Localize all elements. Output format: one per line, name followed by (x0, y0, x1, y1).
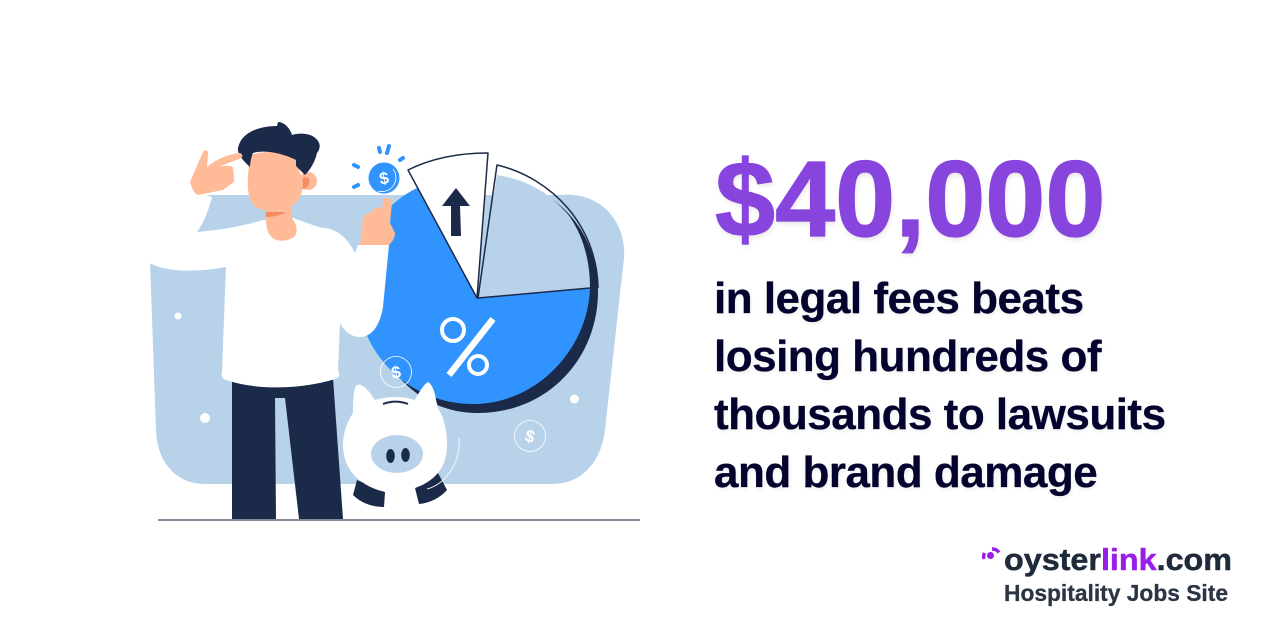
supporting text: thousands to lawsuits (714, 390, 1166, 439)
icon: floating coin on blob: $ (523, 426, 537, 447)
supporting text: and brand damage (714, 448, 1097, 497)
right hand with raised finger (360, 198, 395, 245)
pig snout (371, 435, 423, 473)
icon: floating coin on pie (380, 356, 412, 388)
icon: up arrow (442, 188, 470, 236)
pie light slice outline (478, 165, 598, 298)
supporting text: losing hundreds of (714, 332, 1101, 381)
logo wordmark: oysterlink.com (1004, 542, 1232, 577)
icon: spinning dollar coin: $ (378, 168, 391, 189)
ear (299, 172, 317, 190)
trousers (232, 378, 343, 519)
ground line (158, 519, 640, 521)
pie light slice (478, 175, 590, 298)
pig feet (353, 480, 385, 507)
pie white slice (408, 153, 488, 298)
face (248, 152, 303, 212)
left hand pointing at head (190, 150, 242, 195)
blob decorative dots (174, 312, 579, 423)
icon: percent sign (442, 319, 493, 375)
pig nostrils (386, 449, 395, 463)
background blob (150, 195, 624, 484)
supporting text: in legal fees beats (714, 274, 1084, 323)
man (148, 122, 395, 519)
icon: floating coin on pie: $ (390, 362, 403, 383)
coin sparkle dashes (354, 146, 403, 187)
icon: spinning dollar coin (354, 146, 403, 194)
sweater (148, 190, 389, 387)
neck (266, 208, 297, 241)
neck shadow (266, 212, 286, 217)
icon: oysterlink logo mark (984, 549, 999, 559)
pie main blue (357, 188, 590, 404)
logo tagline: Hospitality Jobs Site (1004, 580, 1228, 606)
hair (238, 122, 320, 175)
pig motion arc (427, 438, 459, 489)
pie shadow crescent (398, 193, 598, 413)
headline figure: $40,000 (715, 138, 1105, 259)
pie chart (357, 153, 598, 413)
piggy bank (343, 382, 459, 507)
pig coin slot (383, 402, 408, 404)
supporting text (714, 274, 1166, 498)
icon: floating coin on blob (514, 420, 546, 452)
ear inner (302, 177, 310, 189)
pig body and ears (343, 382, 447, 505)
